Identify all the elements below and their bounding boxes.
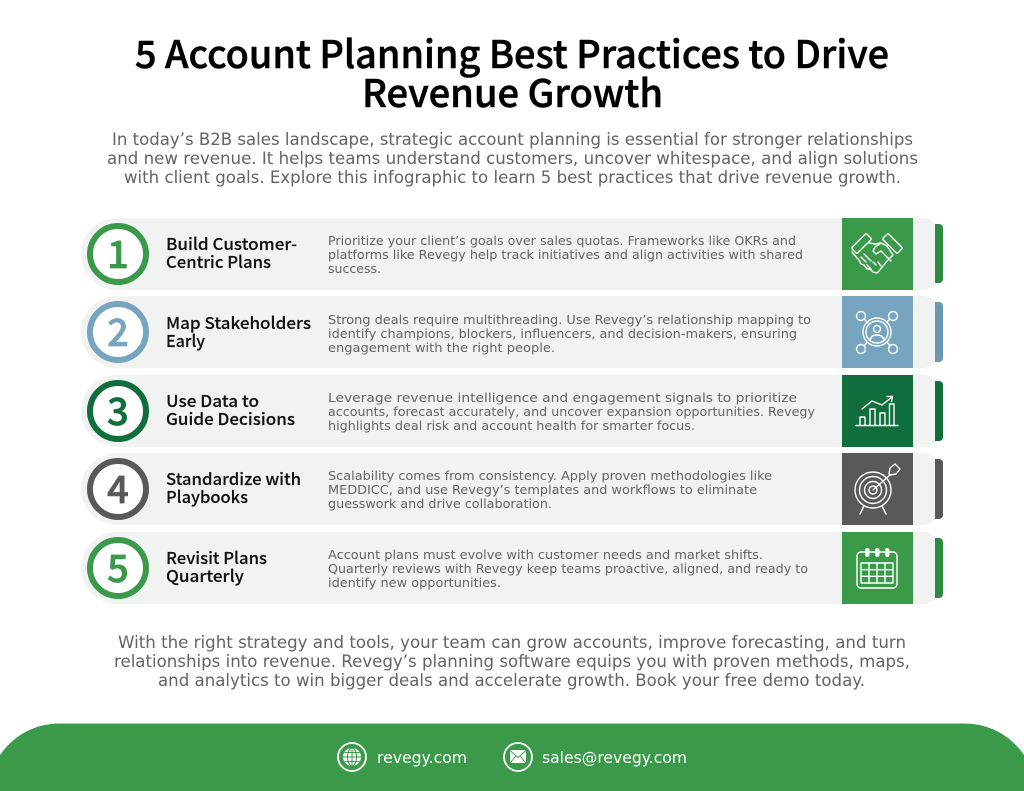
heading 1: Build Customer-: [166, 231, 297, 255]
side tab 3: [935, 381, 943, 441]
panel: step 5: [81, 532, 943, 604]
panel: step 2: [81, 296, 943, 368]
description 4: Scalability comes from consistency. Apply proven methodologies like: [328, 469, 772, 484]
heading 1: Centric Plans: [166, 249, 271, 273]
panel: step 4: [81, 453, 943, 525]
number badge 3: 3: [107, 381, 129, 436]
number badge 2: [90, 302, 146, 360]
side tab 4: [935, 459, 943, 519]
heading 2: Early: [166, 328, 205, 352]
website: revegy.com: [377, 748, 467, 767]
number badge 1: 1: [107, 224, 129, 279]
icon: growth chart: [842, 375, 913, 447]
icon: calendar: [842, 532, 913, 604]
description 3: accounts, forecast accurately, and uncover expansion opportunities. Revegy: [328, 405, 815, 420]
description 2: Strong deals require multithreading. Use Revegy’s relationship mapping to: [328, 313, 811, 328]
panel: step 3: [81, 375, 943, 447]
side tab 5: [935, 538, 943, 598]
description 1: Prioritize your client’s goals over sales quotas. Frameworks like OKRs and: [328, 234, 796, 249]
footer band: [0, 724, 1024, 791]
closing text: and analytics to win bigger deals and accelerate growth. Book your free demo today.: [158, 671, 865, 691]
description 5: identify new opportunities.: [328, 576, 501, 591]
number badge 3: [90, 381, 146, 439]
number badge 4: 4: [107, 459, 129, 514]
description 5: Account plans must evolve with customer needs and market shifts.: [328, 548, 763, 563]
title: [135, 24, 889, 118]
heading 4: [166, 466, 301, 508]
closing text: With the right strategy and tools, your team can grow accounts, improve forecasting, and turn: [118, 633, 906, 653]
description 3: [328, 391, 815, 434]
heading 5: Revisit Plans: [166, 545, 267, 569]
heading 3: Use Data to: [166, 388, 259, 412]
closing text: [114, 633, 910, 691]
description 3: highlights deal risk and account health for smarter focus.: [328, 419, 695, 434]
number badge 1: [90, 224, 146, 282]
icon: target: [842, 453, 913, 525]
heading 5: [166, 545, 267, 587]
title: 5 Account Planning Best Practices to Drive: [135, 24, 889, 79]
heading 5: Quarterly: [166, 563, 244, 587]
side tab 1: [935, 224, 943, 283]
description 1: [328, 234, 803, 277]
intro text: with client goals. Explore this infographic to learn 5 best practices that drive revenue growth.: [124, 168, 901, 188]
icon: envelope: [504, 743, 532, 771]
intro text: [107, 130, 918, 188]
description 5: [328, 548, 808, 591]
description 2: [328, 313, 811, 356]
description 4: guesswork and drive collaboration.: [328, 497, 552, 512]
email: sales@revegy.com: [542, 748, 687, 767]
heading 1: [166, 231, 297, 273]
heading 4: Standardize with: [166, 466, 301, 490]
description 3: Leverage revenue intelligence and engagement signals to prioritize: [328, 391, 797, 406]
heading 3: [166, 388, 295, 430]
title: Revenue Growth: [362, 63, 663, 118]
description 4: [328, 469, 772, 512]
description 5: Quarterly reviews with Revegy keep teams proactive, aligned, and ready to: [328, 562, 808, 577]
side tab 2: [935, 302, 943, 362]
heading 4: Playbooks: [166, 484, 248, 508]
description 1: success.: [328, 262, 381, 277]
closing text: relationships into revenue. Revegy’s planning software equips you with proven methods, maps,: [114, 652, 910, 672]
icon: globe: [338, 743, 366, 771]
description 2: identify champions, blockers, influencers, and decision-makers, ensuring: [328, 327, 797, 342]
description 1: platforms like Revegy help track initiatives and align activities with shared: [328, 248, 803, 263]
panel: step 1: [81, 218, 943, 290]
icon: stakeholder network: [842, 296, 913, 368]
intro text: In today’s B2B sales landscape, strategic account planning is essential for stronger relationships: [112, 130, 913, 150]
number badge 2: 2: [107, 302, 129, 357]
description 4: MEDDICC, and use Revegy’s templates and workflows to eliminate: [328, 483, 757, 498]
heading 2: [166, 310, 311, 352]
heading 3: Guide Decisions: [166, 406, 295, 430]
number badge 5: 5: [107, 538, 129, 593]
description 2: engagement with the right people.: [328, 341, 555, 356]
number badge 4: [90, 459, 146, 517]
icon: handshake: [842, 218, 913, 290]
number badge 5: [90, 538, 146, 596]
intro text: and new revenue. It helps teams understand customers, uncover whitespace, and align solutions: [107, 149, 918, 169]
heading 2: Map Stakeholders: [166, 310, 311, 334]
